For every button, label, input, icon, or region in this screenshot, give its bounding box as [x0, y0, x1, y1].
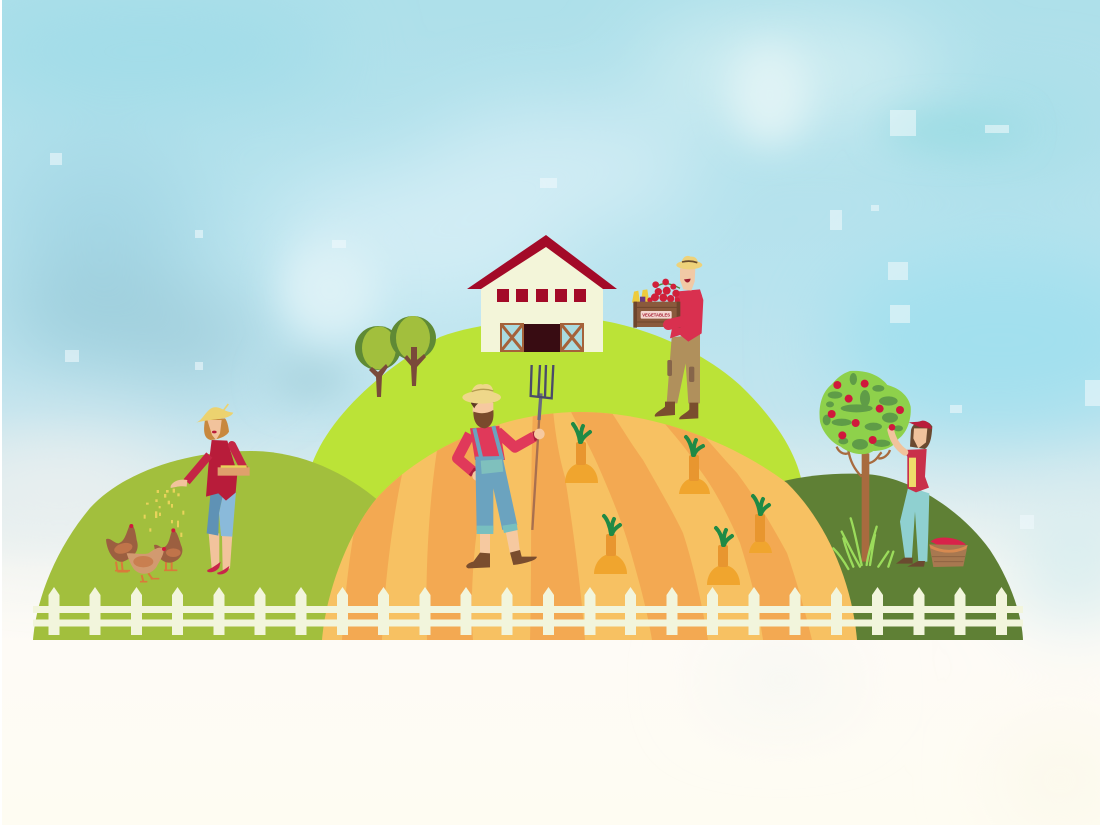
tree small left	[355, 326, 401, 397]
hat	[676, 256, 702, 269]
carrot 4	[707, 528, 740, 585]
knee patches	[667, 360, 694, 382]
legs	[209, 533, 232, 570]
hair	[910, 421, 932, 449]
carrot 3	[594, 516, 627, 574]
trouser cuffs	[477, 523, 518, 534]
arm holding tray	[232, 445, 244, 469]
boots	[466, 550, 537, 568]
face	[207, 420, 222, 440]
hat	[462, 384, 501, 404]
feeding arm	[187, 455, 209, 482]
capri trousers	[207, 492, 236, 537]
hair	[204, 418, 229, 440]
beard	[473, 410, 494, 428]
boots	[655, 402, 698, 419]
chicken back left	[106, 524, 138, 572]
picked apple	[889, 424, 895, 431]
shoes	[207, 562, 229, 574]
crate	[633, 302, 680, 328]
feed grains	[144, 489, 184, 537]
ploughed field	[320, 410, 860, 642]
overalls	[475, 456, 517, 531]
carrot 1	[565, 424, 598, 483]
carrot 2	[679, 437, 710, 494]
trousers	[900, 487, 929, 562]
left hill	[33, 451, 380, 640]
orchard tree	[820, 371, 911, 569]
basket	[929, 537, 968, 567]
raised arm	[891, 430, 905, 452]
tree small right	[390, 316, 436, 386]
woman picking apples	[889, 421, 968, 567]
chicken front	[127, 547, 166, 582]
overall straps	[474, 426, 502, 460]
mouth	[684, 279, 691, 283]
cap	[909, 421, 932, 429]
shirt	[470, 426, 505, 460]
right dark hill	[780, 474, 1023, 640]
feeding hand	[171, 480, 187, 488]
bib pocket	[481, 459, 503, 474]
apples	[828, 380, 904, 444]
foliage	[820, 371, 911, 454]
hair and eyebrows	[471, 398, 493, 408]
pitchfork	[531, 365, 553, 530]
barn	[467, 235, 617, 352]
fence posts	[48, 587, 1007, 635]
trunk and branches	[837, 447, 890, 562]
barn windows	[497, 289, 586, 302]
foliage shading	[823, 373, 903, 450]
face	[680, 268, 695, 291]
arms	[457, 432, 534, 473]
man holding vegetable crate	[632, 256, 703, 419]
arm	[668, 297, 697, 325]
grass	[833, 518, 893, 569]
feed tray	[218, 465, 250, 476]
carrots	[565, 424, 772, 585]
farmer with pitchfork	[457, 365, 553, 568]
shoes	[896, 558, 925, 567]
crate: VEGETABLES	[642, 312, 670, 317]
fence rails	[33, 606, 1023, 626]
legs	[480, 530, 520, 555]
face	[473, 398, 493, 413]
vegetables	[632, 279, 680, 303]
trousers	[667, 334, 700, 403]
picket fence	[33, 587, 1023, 635]
mouth	[212, 431, 217, 433]
hat	[196, 404, 233, 423]
face	[913, 428, 927, 448]
barn door right	[561, 324, 583, 351]
woman feeding chickens	[144, 404, 250, 574]
shirt	[670, 289, 703, 342]
cuffs	[470, 431, 536, 476]
barn roof	[467, 235, 617, 289]
barn door opening	[523, 324, 560, 352]
barn door left	[501, 324, 523, 351]
back hill	[310, 318, 803, 640]
blouse	[206, 440, 237, 501]
chickens	[106, 524, 182, 582]
carrot 5	[749, 496, 772, 553]
barn wall	[481, 245, 603, 352]
shirt	[903, 449, 929, 492]
chicken right	[154, 528, 182, 571]
hands	[472, 429, 545, 481]
